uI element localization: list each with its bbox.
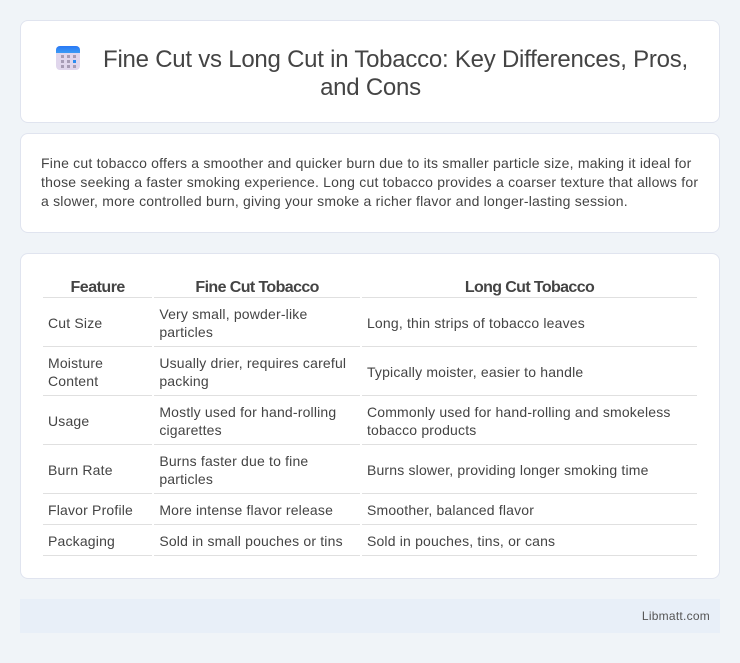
comparison table: Burns faster due to fine particles — [159, 453, 308, 487]
panel: introduction — [20, 133, 720, 233]
comparison table: Long Cut Tobacco — [465, 279, 594, 296]
comparison table: Typically moister, easier to handle — [367, 364, 583, 380]
comparison table: Burns slower, providing longer smoking time — [367, 462, 649, 478]
comparison table: Sold in small pouches or tins — [159, 533, 343, 549]
title: and Cons — [320, 74, 421, 101]
panel: comparison table — [20, 253, 720, 579]
comparison table: Fine Cut Tobacco — [195, 279, 319, 296]
comparison table: Packaging — [48, 533, 115, 549]
comparison table: Very small, powder-like particles — [159, 306, 307, 340]
comparison table — [43, 279, 697, 556]
comparison table: More intense flavor release — [159, 502, 333, 518]
footer: Libmatt.com — [642, 609, 710, 623]
comparison table: Mostly used for hand-rolling cigarettes — [159, 404, 336, 438]
comparison table: Long, thin strips of tobacco leaves — [367, 315, 585, 331]
comparison table: Usage — [48, 413, 89, 429]
comparison table: Commonly used for hand-rolling and smokeless tobacco products — [367, 404, 671, 438]
comparison table: Burn Rate — [48, 462, 113, 478]
intro text: Fine cut tobacco offers a smoother and quicker burn due to its smaller particle size, making it ideal for those seeking a faster smoking experience. Long cut tobacco provides a coarser texture that allows for a slower, more controlled burn, giving your smoke a richer flavor and longer-lasting session. — [41, 155, 698, 209]
comparison table: Sold in pouches, tins, or cans — [367, 533, 555, 549]
panel: header — [20, 20, 720, 123]
footer — [20, 599, 720, 633]
icon: calendar — [56, 46, 80, 70]
comparison table: Feature — [71, 279, 125, 296]
title — [103, 46, 688, 101]
comparison table: Cut Size — [48, 315, 102, 331]
comparison table: Flavor Profile — [48, 502, 133, 518]
comparison table: Smoother, balanced flavor — [367, 502, 534, 518]
comparison table: Usually drier, requires careful packing — [159, 355, 346, 389]
comparison table: Moisture Content — [48, 355, 103, 389]
title: Fine Cut vs Long Cut in Tobacco: Key Differences, Pros, — [103, 46, 688, 73]
